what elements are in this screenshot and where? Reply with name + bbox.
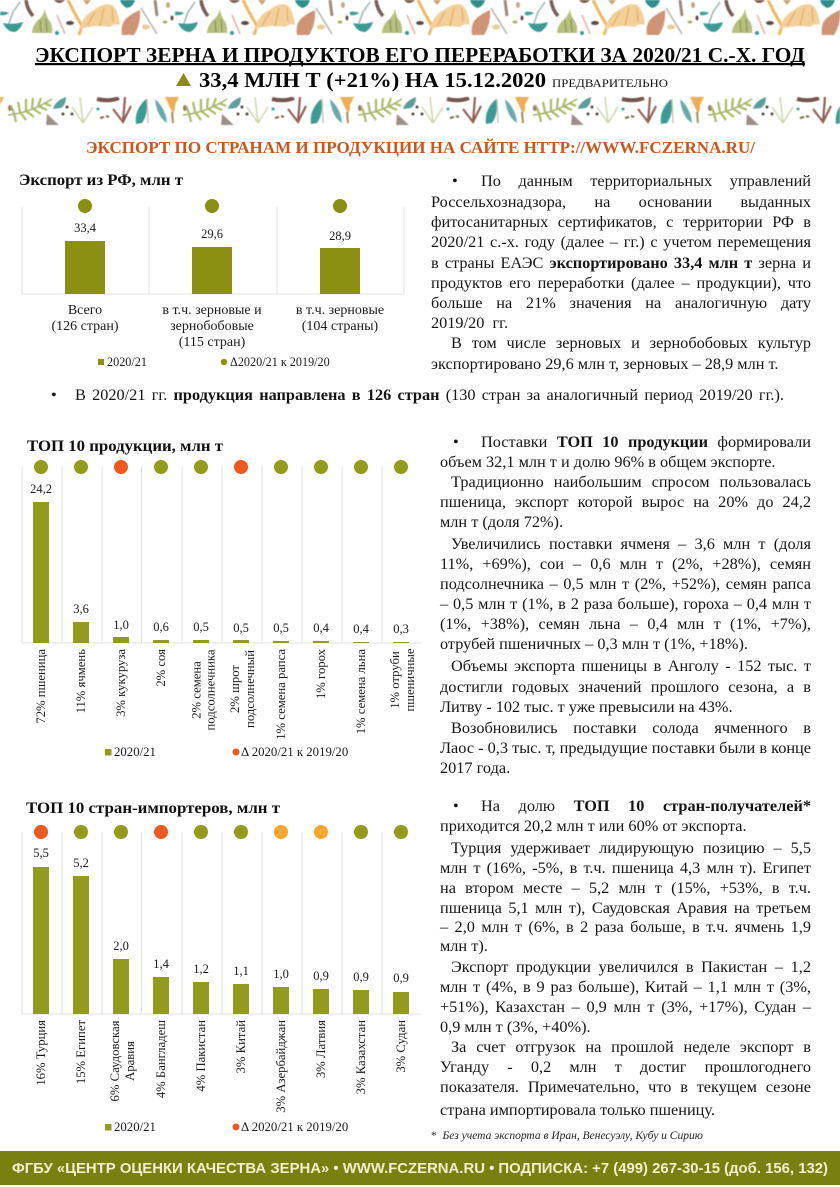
text block: top 10 products: Лаос - 0,3 тыс. т, предыдущие поставки были в конце [440,738,811,757]
category labels: (126 стран) [51,319,119,334]
heading: top 10 importers: ТОП 10 стран-импортеров, млн т [26,798,280,817]
text block: top 10 products [440,432,811,777]
text block: top 10 importers: на втором месте – 5,2 млн т (15%, +53%, в т.ч. [440,878,811,897]
text block: top 10 products: 11%, +69%), сои – 0,6 млн т (2%, +28%), семян [440,554,811,573]
legend: 2020/21 [114,1120,156,1134]
values: 5,2 [73,856,89,870]
text block: top 10 products: пшеница, экспорт которой вырос на 20% до 24,2 [440,492,811,511]
text block: top 10 products: – 0,5 млн т (1%, в 2 раза больше), гороха – 0,4 млн т [440,594,811,613]
text block: top 10 products: достигли годовых значений прошлого сезона, а в [440,677,811,696]
text block: top 10 products: Традиционно наибольшим спросом пользовалась [451,472,811,491]
bars [33,502,409,643]
legend: 2020/21 [107,355,147,369]
panel: export from Russia chart [19,170,404,369]
rotated category labels: 16% Турция [34,1020,48,1086]
rotated category labels: 4% Бангладеш [154,1020,168,1098]
rotated category labels: 2% соя [154,649,168,687]
text block: top 10 importers [440,796,812,1119]
rotated category labels: 1% отруби [388,651,402,709]
rotated category labels: 1% семена рапса [274,649,288,740]
text block: top 10 importers: – 2,0 млн т (6%, в 2 раза больше, в т.ч. ячмень 1,9 [440,917,811,936]
rotated category labels: 3% Латвия [314,1020,328,1078]
text block: top 10 products: млн т (доля 72%). [440,512,563,531]
values [74,221,351,243]
text block: top 10 products: подсолнечника – 0,5 млн т (2%, +52%), семян рапса [440,574,811,593]
title [35,43,805,92]
rotated category labels: 3% Казахстан [354,1020,368,1094]
text block: top 10 products: отрубей пшеничных – 0,3 млн т (1%, +18%). [440,634,748,653]
text block: top 10 products: Возобновились поставки солода ячменного в [451,718,811,737]
values: 0,4 [353,622,370,636]
text block: export summary: экспортировано 29,6 млн т, зерновых – 28,9 млн т. [431,354,778,373]
values: 0,9 [313,969,329,983]
footer bar: ФГБУ «ЦЕНТР ОЦЕНКИ КАЧЕСТВА ЗЕРНА» • WWW.FCZERNA.RU • ПОДПИСКА: +7 (499) 267-30-15 (доб. 156, 132) [12,1160,828,1177]
values: 3,6 [73,602,89,616]
text block: top 10 importers: приходится 20,2 млн т или 60% от экспорта. [440,816,747,835]
heading: top 10 products: ТОП 10 продукции, млн т [27,436,223,455]
rotated category labels: пшеничные [403,648,417,712]
values: 28,9 [329,229,351,243]
rotated category labels: 11% ячмень [74,649,88,713]
values: 0,5 [233,621,249,635]
rotated category labels [34,648,417,740]
rotated category labels: 3% Китай [234,1020,248,1073]
values: 1,2 [193,962,209,976]
text block: export summary: в страны ЕАЭС экспортировано 33,4 млн т зерна и [431,253,811,272]
text block: top 10 products: Объемы экспорта пшеницы в Анголу - 152 тыс. т [451,656,811,675]
bars [33,867,409,1014]
text block: export summary [431,171,811,373]
values: 0,5 [193,620,209,634]
rotated category labels: Аравия [123,1041,137,1081]
status dots [78,199,347,213]
legend: Δ 2020/21 к 2019/20 [241,1120,348,1134]
values: 0,5 [273,621,289,635]
rotated category labels: подсолнечника [204,649,218,731]
values: 0,4 [313,621,330,635]
category labels: (115 стран) [179,335,246,350]
text block: top 10 importers: Уганду - 0,2 млн т достиг прошлогоднего [440,1057,811,1076]
rotated category labels: 3% кукуруза [114,649,128,717]
text block: destination count: • [51,385,57,404]
category labels: в т.ч. зерновые [296,303,384,318]
rotated category labels: 6% Саудовская [108,1020,122,1101]
text block: top 10 importers: 0,9 млн т (3%, +40%). [440,1017,591,1036]
text block: export summary: 2020/21 с.-х. году (далее – гг.) с учетом перемещения [431,232,811,251]
title: 33,4 МЛН Т (+21%) НА 15.12.2020 [199,68,546,92]
text block: top 10 importers: На долю ТОП 10 стран-получателей* [481,796,811,815]
text block: top 10 products: Литву - 102 тыс. т уже превысили на 43%. [440,697,733,716]
text block: top 10 importers: страна импортировала только пшеницу. [440,1100,715,1119]
category labels: (104 страны) [302,319,379,334]
footer bar [0,1151,840,1185]
values: 1,0 [113,618,129,632]
text block: export summary: больше на 21% значения на аналогичную дату [431,293,811,312]
legend [98,355,330,369]
text block: export summary: фитосанитарных сертификатов, с территории РФ в [431,212,811,231]
text block: top 10 importers: +51%), Казахстан – 0,9 млн т (3%, +17%), Судан – [440,997,811,1016]
rotated category labels: 1% горох [314,648,328,699]
text block: top 10 products: Увеличились поставки ячменя – 3,6 млн т (доля [451,534,811,553]
text block: export summary: Россельхознадзора, на основании выданных [431,192,811,211]
text block: top 10 importers: За счет отгрузок на прошлой неделе экспорт в [451,1037,811,1056]
text block: top 10 importers: Турция удерживает лидирующую позицию – 5,5 [451,838,811,857]
values: 0,9 [353,970,369,984]
text block: top 10 importers: • [453,796,459,815]
values: 33,4 [74,221,97,235]
rotated category labels [34,1020,408,1113]
values: 5,5 [33,846,49,860]
heading: export from Russia: Экспорт из РФ, млн т [19,170,183,189]
decorative top botanical band [0,0,840,36]
website link heading: ЭКСПОРТ ПО СТРАНАМ И ПРОДУКЦИИ НА САЙТЕ HTTP://WWW.FCZERNA.RU/ [86,138,755,157]
legend [105,745,348,759]
rotated category labels: подсолнечный [243,650,257,728]
bars [65,241,360,294]
values: 1,0 [273,967,289,981]
text block: export summary: 2019/20 гг. [431,313,508,332]
legend [105,1120,348,1134]
text block: export summary: В том числе зерновых и зернобобовых культур [451,333,811,352]
panel: top 10 importers chart [22,798,421,1134]
category labels: Всего [68,303,102,318]
rotated category labels: 72% пшеница [34,649,48,724]
title: ЭКСПОРТ ЗЕРНА И ПРОДУКТОВ ЕГО ПЕРЕРАБОТКИ ЗА 2020/21 С.-Х. ГОД [35,43,805,67]
values [33,846,409,985]
category labels: в т.ч. зерновые и [162,303,262,318]
status dots [34,825,408,839]
text block: top 10 products: 2017 года. [440,758,510,777]
values [30,482,409,636]
panel: top 10 products chart [22,436,421,759]
text block: top 10 importers: показателя. Примечательно, что в текущем сезоне [440,1077,811,1096]
text block: top 10 products: • [453,432,459,451]
text block: export summary: • [452,171,458,190]
text block: top 10 products: объем 32,1 млн т и долю 96% в общем экспорте. [440,452,776,471]
category labels [51,303,384,350]
values: 0,9 [393,971,409,985]
values: 1,4 [153,957,170,971]
values: 1,1 [233,964,249,978]
legend: Δ2020/21 к 2019/20 [230,355,330,369]
category labels: зернобобовые [170,319,254,334]
footnote: * Без учета экспорта в Иран, Венесуэлу, Кубу и Сирию [431,1130,703,1142]
text block: top 10 products: (1%, +38%), семян льна – 0,4 млн т (1%, +7%), [440,614,811,633]
rotated category labels: 3% Судан [394,1020,408,1073]
text block: top 10 importers: Экспорт продукции увеличился в Пакистан – 1,2 [451,957,811,976]
values: 2,0 [113,939,129,953]
decorative lower botanical band [0,96,840,126]
text block: destination count: В 2020/21 гг. продукция направлена в 126 стран (130 стран за аналогичный период 2019/20 гг.). [75,385,784,404]
values: 29,6 [201,227,223,241]
legend: Δ 2020/21 к 2019/20 [241,745,348,759]
rotated category labels: 3% Азербайджан [274,1020,288,1113]
text block: top 10 importers: пшеница 5,1 млн т), Саудовская Аравия на третьем [440,898,811,917]
values: 24,2 [30,482,52,496]
legend: 2020/21 [114,745,156,759]
values: 0,3 [393,622,409,636]
rotated category labels: 15% Египет [74,1020,88,1084]
text block: top 10 importers: млн т (4%, в 9 раз больше), Китай – 1,1 млн т (3%, [440,977,811,996]
title: ПРЕДВАРИТЕЛЬНО [552,78,668,90]
text block: top 10 importers: млн т (16%, -5%, в т.ч. пшеница 4,3 млн т). Египет [440,858,811,877]
text block: top 10 products: Поставки ТОП 10 продукции формировали [481,432,811,451]
status dots [34,460,408,474]
values: 0,6 [153,620,169,634]
text block: export summary: продуктов его переработки (далее – продукции), что [431,273,811,292]
rotated category labels: 2% семена [190,661,204,719]
rotated category labels: 2% шрот [228,665,242,713]
rotated category labels: 4% Пакистан [194,1020,208,1092]
text block: top 10 importers: млн т). [440,936,488,955]
rotated category labels: 1% семена льна [354,649,368,734]
text block: export summary: По данным территориальных управлений [481,171,811,190]
